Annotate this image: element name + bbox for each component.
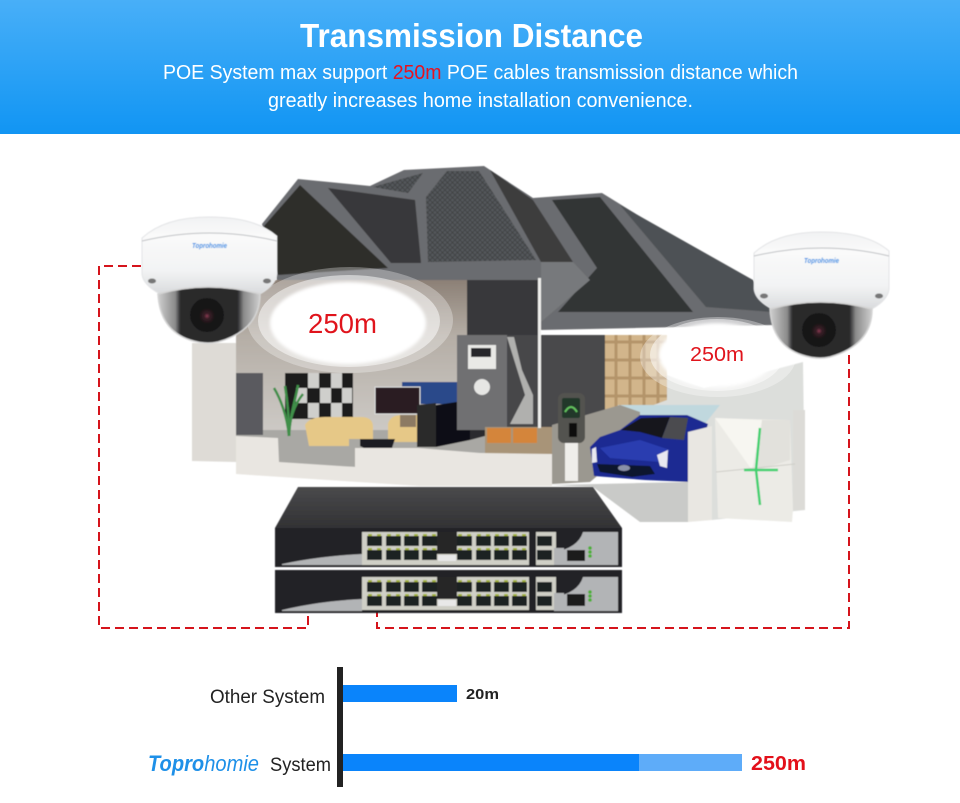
- roof: overall mass: [262, 166, 775, 330]
- title: Transmission Distance: [300, 17, 643, 54]
- camera logo: Toprohomie: [804, 258, 839, 265]
- label: 250m: [308, 308, 377, 339]
- range bubble: left 250m: [247, 267, 453, 373]
- subtitle line 1: POE System max support 250m POE cables transmission distance which: [163, 62, 798, 84]
- row: other system: [210, 685, 499, 708]
- dome camera: right: [754, 232, 889, 358]
- white battery box with green light: [715, 410, 805, 522]
- EV charger: [558, 393, 585, 481]
- chart axis: [337, 667, 343, 787]
- row: other system: Other System: [210, 687, 325, 708]
- dashed cable: left camera to switch: [99, 266, 308, 628]
- yellow sofa: [305, 415, 417, 446]
- row: other system: 20m: [466, 686, 499, 703]
- subtitle line 2: greatly increases home installation convenience.: [268, 90, 693, 112]
- white wall pillar: [688, 426, 712, 522]
- central grey wall with stairs: [457, 335, 539, 430]
- camera logo: Toprohomie: [192, 243, 227, 250]
- coffee table: [360, 439, 395, 451]
- low garage side wall: [552, 405, 640, 484]
- upper interior: [236, 280, 468, 440]
- garage dark wall: [541, 335, 605, 435]
- bar chart: transmission distance comparison: [148, 667, 806, 787]
- PoE switch: bottom unit: [275, 570, 622, 613]
- roof: left gable: [264, 185, 421, 275]
- orange boxes: [485, 427, 552, 455]
- white pillar: [538, 278, 541, 428]
- range bubble: right 250m: [640, 317, 796, 397]
- PoE switch: top unit: [275, 487, 622, 567]
- roof: right wing: [541, 197, 772, 322]
- header banner: [0, 0, 960, 134]
- lower white wall: [236, 436, 552, 486]
- garage rear wall: [618, 362, 805, 520]
- floor: [236, 430, 552, 470]
- roof: central solar panels: [373, 170, 573, 262]
- checkerboard wall: [285, 373, 353, 419]
- dashed cable: right camera to switch: [377, 355, 849, 628]
- black partition: [417, 396, 485, 447]
- TV and cabinet: [375, 382, 458, 414]
- row: Toprohomie system: Toprohomie: [148, 751, 259, 776]
- wooden shelf: [605, 335, 667, 410]
- house illustration: [192, 166, 805, 522]
- central dark panel: [467, 280, 539, 335]
- plant: [274, 385, 303, 436]
- door: [236, 373, 263, 435]
- row: Toprohomie system: System: [270, 755, 331, 776]
- wall: left exterior: [192, 343, 236, 462]
- blue sports car: [590, 415, 708, 482]
- dome camera: left: [142, 217, 277, 343]
- label: 250m: [690, 344, 744, 366]
- row: Toprohomie system: [148, 751, 806, 776]
- driveway: [550, 482, 688, 522]
- row: Toprohomie system: 250m: [751, 753, 806, 775]
